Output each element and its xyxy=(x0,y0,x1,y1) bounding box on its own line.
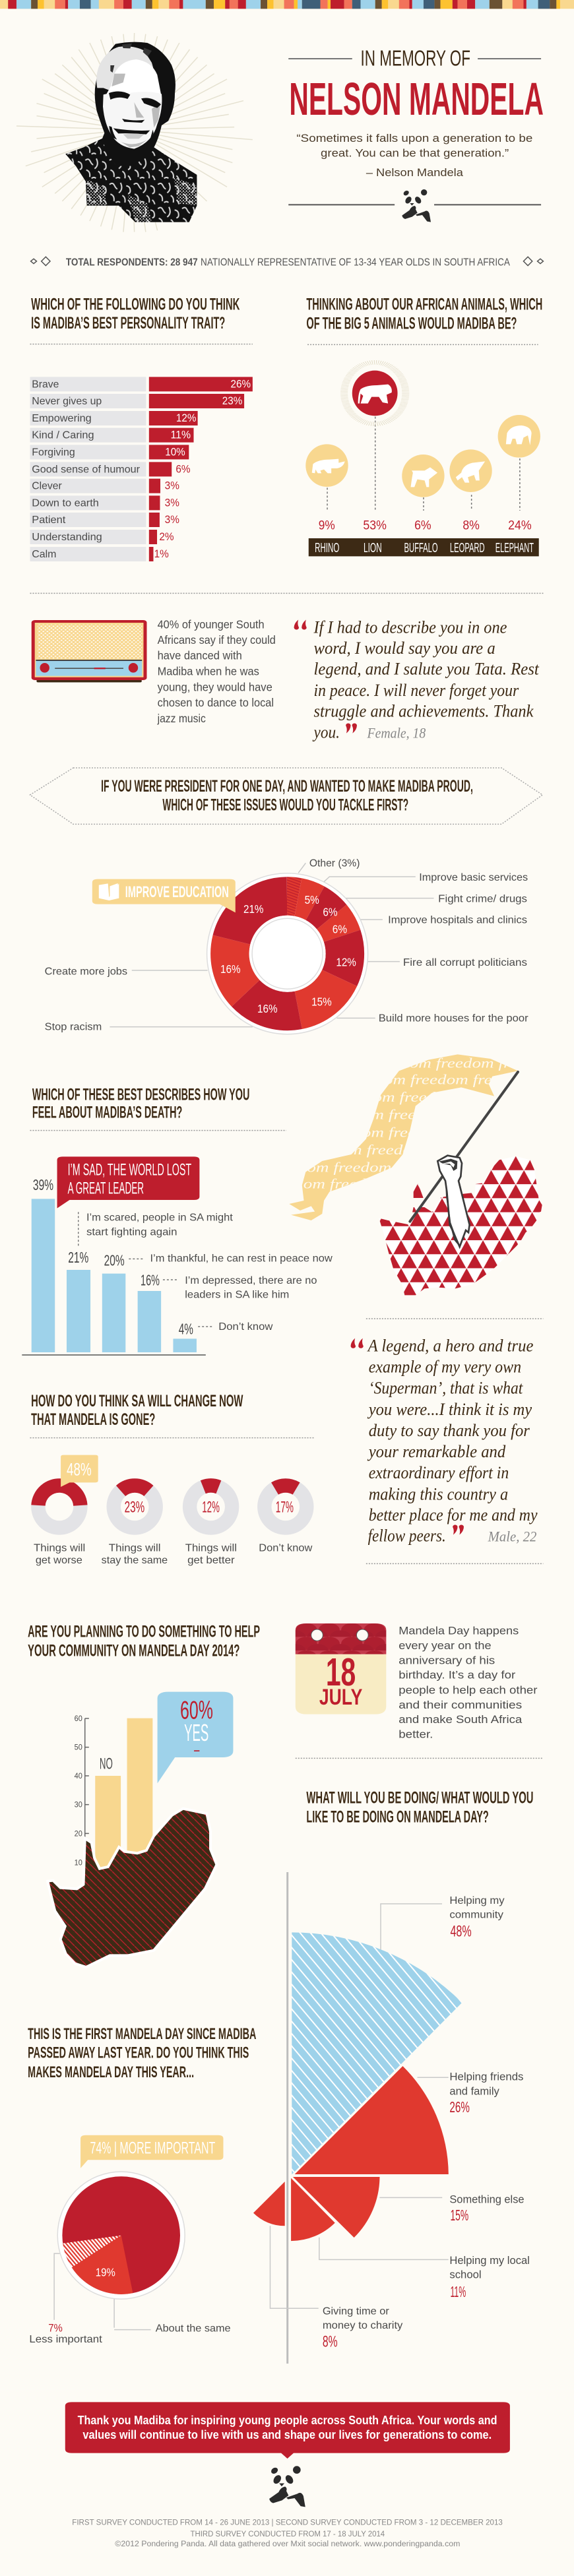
label: charity: Giving time or xyxy=(323,2305,389,2317)
panel: what will you be doing on Mandela Day xyxy=(253,1788,533,2364)
callout: 60% yes xyxy=(158,1692,233,1783)
animal percentages: 24% xyxy=(508,518,532,532)
animal percentages xyxy=(319,518,532,532)
donut percentages xyxy=(125,1498,294,1516)
freedom text on ribbon xyxy=(303,1058,506,1191)
donut values and labels: 17% xyxy=(276,1498,294,1516)
freedom text on ribbon: freedom freedom xyxy=(304,1143,425,1158)
donut values: 21% xyxy=(243,903,263,916)
chart axis: 30 xyxy=(75,1800,82,1809)
donut labels: Things will xyxy=(109,1542,161,1554)
donut chart xyxy=(207,873,368,1034)
bar values: 2% xyxy=(159,530,174,543)
donut percentages: 12% xyxy=(202,1498,220,1516)
icon: closing quote mark xyxy=(453,1525,464,1535)
trait labels: Clever xyxy=(32,480,62,491)
freedom text on ribbon: freedom freedom freedom xyxy=(271,1160,454,1176)
bar values: 20% xyxy=(104,1251,125,1269)
triangle patterned map xyxy=(379,1156,542,1295)
bar values: 10% xyxy=(165,445,185,458)
label backgrounds xyxy=(30,377,146,561)
survey credits: THIRD SURVEY CONDUCTED FROM 17 - 18 JULY 2014 xyxy=(191,2529,385,2538)
quote text: fellow peers. xyxy=(368,1526,446,1545)
bars: no and yes: NO xyxy=(100,1755,113,1773)
callout: sad, lost a great leader: A GREAT LEADER xyxy=(68,1179,144,1197)
feeling labels: I’m scared, people in SA might xyxy=(86,1212,233,1223)
feeling labels: leaders in SA like him xyxy=(185,1289,289,1300)
pie labels xyxy=(29,2321,231,2345)
heading: FEEL ABOUT MADIBA’S DEATH? xyxy=(32,1104,182,1121)
jazz fact text: chosen to dance to local xyxy=(158,697,274,709)
heading xyxy=(31,295,240,332)
labels lower: Helping my local xyxy=(449,2254,530,2267)
quote text xyxy=(296,132,532,179)
raised arm and hand xyxy=(437,1156,470,1247)
jazz fact text: Madiba when he was xyxy=(158,665,259,678)
panel: big five animals xyxy=(30,295,543,593)
issue labels: Create more jobs xyxy=(45,965,127,977)
issue labels xyxy=(45,857,528,1032)
text: IS MADIBA’S BEST PERSONALITY TRAIT? xyxy=(31,314,225,332)
donut values and labels xyxy=(34,1455,313,1566)
icon: panda logo xyxy=(402,189,431,222)
sector: local school 11% xyxy=(291,2178,335,2241)
illustration: triangle map, flag pole and raised arm xyxy=(379,1072,542,1295)
donut values: 6% xyxy=(333,923,347,936)
pie labels: About the same xyxy=(156,2322,231,2334)
donut labels: Things will xyxy=(34,1542,85,1554)
donut: get better 12% xyxy=(183,1479,238,1534)
callout: 60% yes: 60% xyxy=(180,1696,213,1724)
sunburst rays behind portrait xyxy=(16,33,253,232)
respondent: Male, 22 xyxy=(488,1528,536,1545)
chart axis: 60 xyxy=(75,1714,82,1723)
dashed connectors xyxy=(327,417,520,511)
animal percentages: 8% xyxy=(462,518,480,532)
explanation text: and their communities xyxy=(399,1699,522,1711)
freedom text on ribbon: freedom freedom xyxy=(326,1125,447,1140)
bar values: 26% xyxy=(231,377,251,390)
animal percentages: 9% xyxy=(319,518,335,532)
leader line: community xyxy=(381,1904,442,1986)
animal name bar: LEOPARD xyxy=(450,540,485,555)
chart axis: 40 xyxy=(75,1772,82,1780)
bar values: 12% xyxy=(176,412,196,424)
heading xyxy=(101,777,473,814)
jazz fact text: jazz music xyxy=(157,712,206,725)
quote text xyxy=(367,1335,538,1545)
bar values: 39% xyxy=(33,1176,53,1193)
donut: don't know 17% xyxy=(257,1478,315,1536)
labels lower: and family xyxy=(449,2085,499,2098)
icon: radio xyxy=(32,620,146,682)
trait labels: Patient xyxy=(32,514,65,526)
freedom text on ribbon: freedom freedom freedom xyxy=(348,1073,531,1087)
chart axis: 50 xyxy=(75,1743,82,1752)
heading xyxy=(306,1788,533,1826)
panel: quote from male, 22 xyxy=(351,1319,543,1563)
donut labels and callout xyxy=(45,857,528,1032)
feeling labels: Don’t know xyxy=(218,1321,273,1333)
icon: buffalo xyxy=(402,455,445,497)
trait labels: Never gives up xyxy=(32,395,102,407)
animal percentages: 53% xyxy=(363,518,387,532)
explanation text: better. xyxy=(399,1728,433,1740)
panel: president for a day xyxy=(30,768,542,824)
feeling labels: I’m depressed, there are no xyxy=(185,1274,317,1286)
labels lower: Something else xyxy=(449,2193,525,2205)
jazz fact text: 40% of younger South xyxy=(158,618,265,631)
donut: things will get worse 48% xyxy=(37,1484,82,1529)
bar values: 1% xyxy=(154,548,169,560)
icon: closing quote mark xyxy=(346,724,357,734)
vertical axis xyxy=(286,1872,288,2364)
heading xyxy=(28,1622,260,1660)
labels upper: 48% xyxy=(450,1922,472,1940)
bar values: 3% xyxy=(165,496,179,509)
label: charity: 8% xyxy=(323,2332,338,2350)
bar values xyxy=(154,377,251,560)
explanation text: and make South Africa xyxy=(399,1713,523,1726)
donut values: 16% xyxy=(220,963,241,976)
explanation text: every year on the xyxy=(399,1639,492,1652)
labels lower: 11% xyxy=(450,2283,466,2300)
labels upper xyxy=(449,1895,505,1940)
explanation text: Mandela Day happens xyxy=(399,1625,519,1637)
labels lower: school xyxy=(449,2268,482,2280)
heading: THAT MANDELA IS GONE? xyxy=(31,1410,155,1429)
panel: first Mandela Day xyxy=(28,2025,256,2345)
icon: lion xyxy=(352,371,398,416)
explanation text: birthday. It’s a day for xyxy=(399,1669,516,1681)
callout: sad, lost a great leader xyxy=(57,1156,199,1209)
jazz fact text xyxy=(157,618,276,725)
labels lower: 15% xyxy=(450,2207,468,2224)
panel: feelings about Madiba's death: 4% xyxy=(179,1320,193,1337)
labels lower xyxy=(270,2070,530,2308)
explanation text: anniversary of his xyxy=(399,1654,495,1666)
chart axis: 10 xyxy=(75,1858,82,1867)
bar values: 23% xyxy=(222,394,242,407)
pie chart xyxy=(57,2172,185,2299)
trait labels: Down to earth xyxy=(32,497,99,509)
labels upper: community xyxy=(449,1909,503,1920)
bar chart xyxy=(22,1199,206,1355)
portrait of Nelson Mandela xyxy=(65,42,197,222)
icon: opening quote mark xyxy=(294,619,307,629)
callout: 48% xyxy=(61,1455,98,1487)
animal name bar: LION xyxy=(364,540,382,555)
callout: improve education xyxy=(92,879,236,912)
issue labels: Stop racism xyxy=(45,1021,102,1032)
donut values: 6% xyxy=(323,906,338,919)
donut values: 15% xyxy=(311,995,332,1009)
sector: charity 8% xyxy=(253,2182,285,2226)
label: charity: money to charity xyxy=(323,2319,403,2331)
feeling labels xyxy=(86,1212,333,1333)
bar values: 6% xyxy=(175,462,191,475)
heading xyxy=(32,1085,249,1121)
pie labels: 7% xyxy=(48,2321,63,2334)
panel: radio and jazz fact xyxy=(32,618,276,725)
trait labels: Empowering xyxy=(32,412,92,424)
explanation text xyxy=(399,1625,538,1740)
panel: feelings about Madiba's death xyxy=(22,1085,333,1355)
donut labels: get better xyxy=(187,1554,235,1566)
chart axis xyxy=(75,1714,89,1885)
trait labels: Brave xyxy=(32,378,59,390)
animal name bar: BUFFALO xyxy=(404,540,438,555)
callout: 60% yes: YES xyxy=(184,1720,208,1746)
trait labels: Understanding xyxy=(32,531,102,543)
bars xyxy=(149,377,253,561)
icon: calendar 18 July: JULY xyxy=(319,1684,362,1709)
icon: panda logo xyxy=(269,2466,305,2507)
title block xyxy=(288,46,544,204)
quote text: you. xyxy=(312,722,340,741)
donut labels and callout: IMPROVE EDUCATION xyxy=(125,883,229,900)
heading and callout: MAKES MANDELA DAY THIS YEAR... xyxy=(28,2063,194,2081)
bar values: 3% xyxy=(165,513,179,526)
labels lower: Helping friends xyxy=(449,2070,523,2083)
animal name bar xyxy=(309,538,539,556)
trait labels: Good sense of humour xyxy=(32,463,140,475)
top colour strip xyxy=(0,0,574,9)
panel: feelings about Madiba's death: I’M SAD, THE WORLD LOST xyxy=(68,1161,191,1179)
bar values: 11% xyxy=(171,428,191,441)
icon: calendar 18 July: 18 xyxy=(326,1650,356,1694)
label: charity xyxy=(323,2305,403,2350)
donut labels: stay the same xyxy=(102,1554,168,1566)
donut labels: Things will xyxy=(185,1542,237,1554)
freedom text on ribbon: freedom freedom freedom xyxy=(267,1177,450,1192)
quote text: – Nelson Mandela xyxy=(366,166,463,179)
icon: opening quote mark xyxy=(351,1338,364,1348)
trait labels xyxy=(32,378,140,560)
bars: no and yes xyxy=(95,1718,152,1875)
flag pole xyxy=(410,1072,518,1222)
illustration: freedom flag ribbon xyxy=(289,1054,517,1220)
panel: personality trait bar chart xyxy=(30,295,253,561)
panel: Mandela Day 2014 plans xyxy=(28,1622,260,1967)
donut: stay the same 23% xyxy=(105,1477,164,1536)
panel: how SA will change xyxy=(30,1392,315,1438)
icon: rhino xyxy=(305,444,348,487)
labels lower: 26% xyxy=(449,2098,470,2116)
jazz fact text: Africans say if they could xyxy=(158,634,276,646)
icon: leopard xyxy=(449,449,492,492)
donut values: 16% xyxy=(257,1003,278,1015)
heading and callout xyxy=(28,2025,256,2328)
pie labels: Less important xyxy=(29,2333,102,2345)
freedom text on ribbon: freedom freedom xyxy=(326,1108,447,1123)
heading and callout: 74% | MORE IMPORTANT xyxy=(90,2138,215,2157)
respondents strip xyxy=(31,256,543,268)
heading xyxy=(31,1392,243,1429)
feeling labels: I’m thankful, he can rest in peace now xyxy=(150,1253,333,1264)
donut values: 12% xyxy=(336,956,356,969)
panel: quote from female, 18 xyxy=(294,617,539,741)
jazz fact text: have danced with xyxy=(158,649,242,662)
chart axis: 20 xyxy=(75,1829,82,1838)
quote text xyxy=(312,617,539,741)
animal percentages: 6% xyxy=(414,518,431,532)
trait labels: Kind / Caring xyxy=(32,429,94,441)
issue labels: Fight crime/ drugs xyxy=(438,893,527,904)
icon: elephant xyxy=(498,415,540,458)
donut values xyxy=(220,894,356,1015)
donut values: 5% xyxy=(305,894,319,906)
respondents strip: TOTAL RESPONDENTS: 28 947 xyxy=(66,256,198,268)
labels upper: Helping my xyxy=(449,1895,505,1906)
lion sunburst rays xyxy=(344,362,406,424)
icon: calendar 18 July xyxy=(296,1623,386,1714)
feeling labels: start fighting again xyxy=(86,1226,177,1238)
leader lines xyxy=(110,863,433,1027)
bar values: 3% xyxy=(165,479,179,491)
animal name bar: RHINO xyxy=(315,540,339,555)
bar values xyxy=(33,1176,193,1337)
icon: book xyxy=(99,883,119,900)
trait labels: Calm xyxy=(32,548,56,560)
footer xyxy=(65,2402,510,2548)
heading xyxy=(306,295,542,332)
donut labels: Don’t know xyxy=(259,1542,313,1554)
respondent: Female, 18 xyxy=(367,725,426,741)
pie value: 19% xyxy=(96,2266,115,2279)
donut labels xyxy=(34,1542,313,1566)
striped South Africa map xyxy=(48,1809,216,1967)
trait labels: Forgiving xyxy=(32,446,75,458)
sector: something else 15% xyxy=(293,2177,380,2238)
sector: friends and family 26% xyxy=(295,2066,449,2174)
donut labels: get worse xyxy=(36,1554,82,1566)
donut percentages: 23% xyxy=(125,1498,144,1516)
callout: 48%: 48% xyxy=(67,1460,92,1479)
jazz fact text: young, they would have xyxy=(158,681,272,694)
freedom text on ribbon: freedom freedom xyxy=(336,1090,458,1105)
issue labels: Other (3%) xyxy=(309,857,360,869)
survey credits xyxy=(72,2518,503,2548)
sector: helping my community 48% xyxy=(292,1932,462,2174)
bar values: 21% xyxy=(68,1249,88,1266)
thank-you banner xyxy=(65,2402,510,2459)
panel: Mandela Day explanation xyxy=(296,1623,543,1758)
bar values: 16% xyxy=(141,1271,160,1288)
